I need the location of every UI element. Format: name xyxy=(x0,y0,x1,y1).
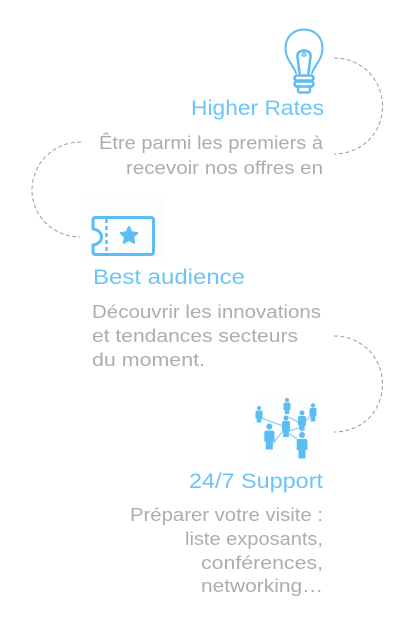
dashed connector: lower right xyxy=(334,336,382,432)
text block: second description xyxy=(92,302,321,370)
person 2 xyxy=(284,398,290,414)
text block: third description xyxy=(130,505,323,596)
person 4 xyxy=(298,410,306,430)
text block: first description xyxy=(99,133,324,178)
heading: Higher Rates: Higher Rates xyxy=(191,97,324,120)
text block: second description: Découvrir les innovations xyxy=(92,302,321,322)
icon: light bulb xyxy=(286,30,322,92)
person 7 xyxy=(297,432,308,458)
person 6 xyxy=(264,424,274,450)
text block: first description: Être parmi les premiers à xyxy=(99,133,324,153)
person 3 xyxy=(310,403,316,422)
icon: network of people xyxy=(254,398,319,460)
text block: second description: et tendances secteurs xyxy=(92,326,298,346)
icon background xyxy=(80,195,165,261)
text block: third description: liste exposants, xyxy=(185,529,323,549)
person 5 xyxy=(282,415,290,437)
person 1 xyxy=(256,406,262,422)
text block: third description: networking… xyxy=(201,576,323,596)
dashed connector: top right xyxy=(334,58,382,154)
text block: third description: conférences, xyxy=(201,553,323,573)
heading: 24/7 Support: 24/7 Support xyxy=(189,470,323,493)
icon: ticket with star xyxy=(93,218,154,254)
heading: Best audience: Best audience xyxy=(93,266,245,289)
dashed connector: left xyxy=(32,142,81,237)
text block: first description: recevoir nos offres en xyxy=(126,158,323,178)
text block: second description: du moment. xyxy=(92,350,205,370)
text block: third description: Préparer votre visite : xyxy=(130,505,323,525)
